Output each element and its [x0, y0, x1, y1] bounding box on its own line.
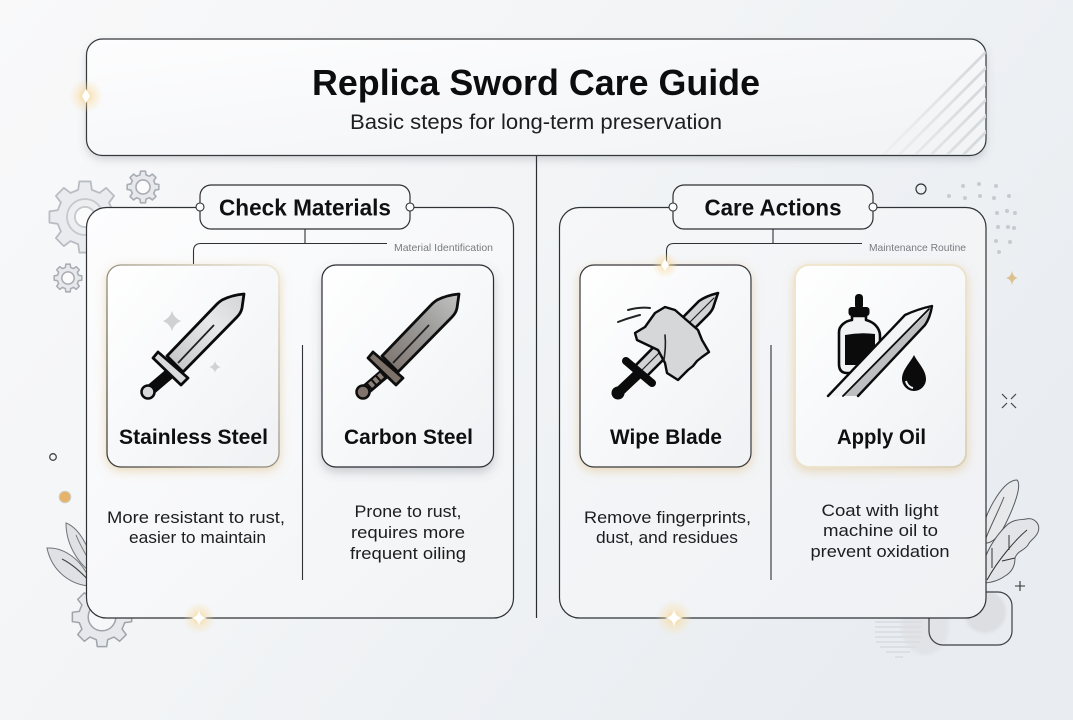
decoration: header diagonal stripes	[899, 50, 986, 155]
connector lines	[666, 229, 862, 264]
icon: gold dot	[59, 491, 71, 503]
text: wipe description: Remove fingerprints,	[584, 508, 751, 527]
decoration: striped lines bottom right	[875, 622, 922, 657]
label: maintenance routine: Maintenance Routine	[869, 242, 966, 254]
text: carbon description: frequent oiling	[350, 544, 466, 563]
text: carbon description: requires more	[351, 523, 465, 542]
card label: apply oil: Apply Oil	[837, 425, 926, 449]
glow: panel bottom left	[183, 602, 215, 634]
text: oil description: machine oil to	[823, 521, 938, 540]
decoration: dot cluster	[947, 182, 1017, 254]
icon: oil bottle	[839, 294, 880, 373]
icon: x sparkle	[1002, 394, 1016, 408]
icon: large gear	[49, 181, 121, 253]
icon: stainless sword	[142, 294, 244, 398]
icon: small ring left	[50, 454, 56, 460]
text: oil description: Coat with light	[822, 501, 939, 520]
panel: care actions	[560, 185, 986, 636]
label: material identification: Material Identification	[394, 242, 493, 254]
panel: header	[69, 39, 1073, 156]
text: carbon description: Prone to rust,	[354, 502, 462, 521]
decoration: bottom right rounded box	[929, 591, 1012, 645]
icon: small gear left	[54, 264, 82, 292]
icon: gold star	[1006, 271, 1018, 285]
decoration: grey blob	[901, 597, 949, 655]
text: stainless description: More resistant to rust,	[107, 508, 285, 527]
heading: check materials	[196, 185, 414, 229]
glow: header left	[69, 79, 103, 113]
icon: right leaves	[982, 480, 1039, 583]
icon: ring top right	[916, 184, 926, 194]
connector lines	[194, 229, 387, 264]
card: apply oil	[795, 265, 966, 467]
icon: plus	[1015, 581, 1025, 591]
divider: materials	[302, 345, 304, 580]
icon: carbon sword	[356, 294, 459, 398]
card: carbon steel	[322, 265, 494, 467]
title: Replica Sword Care Guide	[312, 62, 760, 103]
subtitle: Basic steps for long-term preservation	[350, 111, 722, 134]
icon: bottom gear	[72, 587, 132, 647]
card label: wipe blade: Wipe Blade	[610, 425, 722, 449]
center divider	[536, 155, 538, 618]
card label: carbon steel: Carbon Steel	[344, 425, 473, 449]
heading: care actions	[669, 185, 877, 229]
text: oil description: prevent oxidation	[810, 542, 950, 561]
divider: actions	[770, 345, 772, 580]
card: stainless steel	[107, 265, 279, 467]
panel: check materials	[86, 185, 514, 634]
icon: small gear top	[127, 171, 159, 203]
glow: wipe card top	[652, 252, 678, 278]
icon: left leaves	[47, 523, 92, 586]
text: stainless description: easier to maintain	[129, 528, 266, 547]
icon: oil drop	[902, 355, 926, 391]
card: wipe blade	[580, 265, 751, 467]
icon: oiled sword	[828, 306, 932, 396]
heading: care actions: Care Actions	[704, 194, 842, 220]
glow: panel bottom right	[656, 600, 692, 636]
heading: check materials: Check Materials	[219, 194, 391, 220]
card label: stainless steel: Stainless Steel	[119, 425, 268, 449]
icon: wipe blade	[612, 293, 718, 400]
text: wipe description: dust, and residues	[596, 528, 738, 547]
